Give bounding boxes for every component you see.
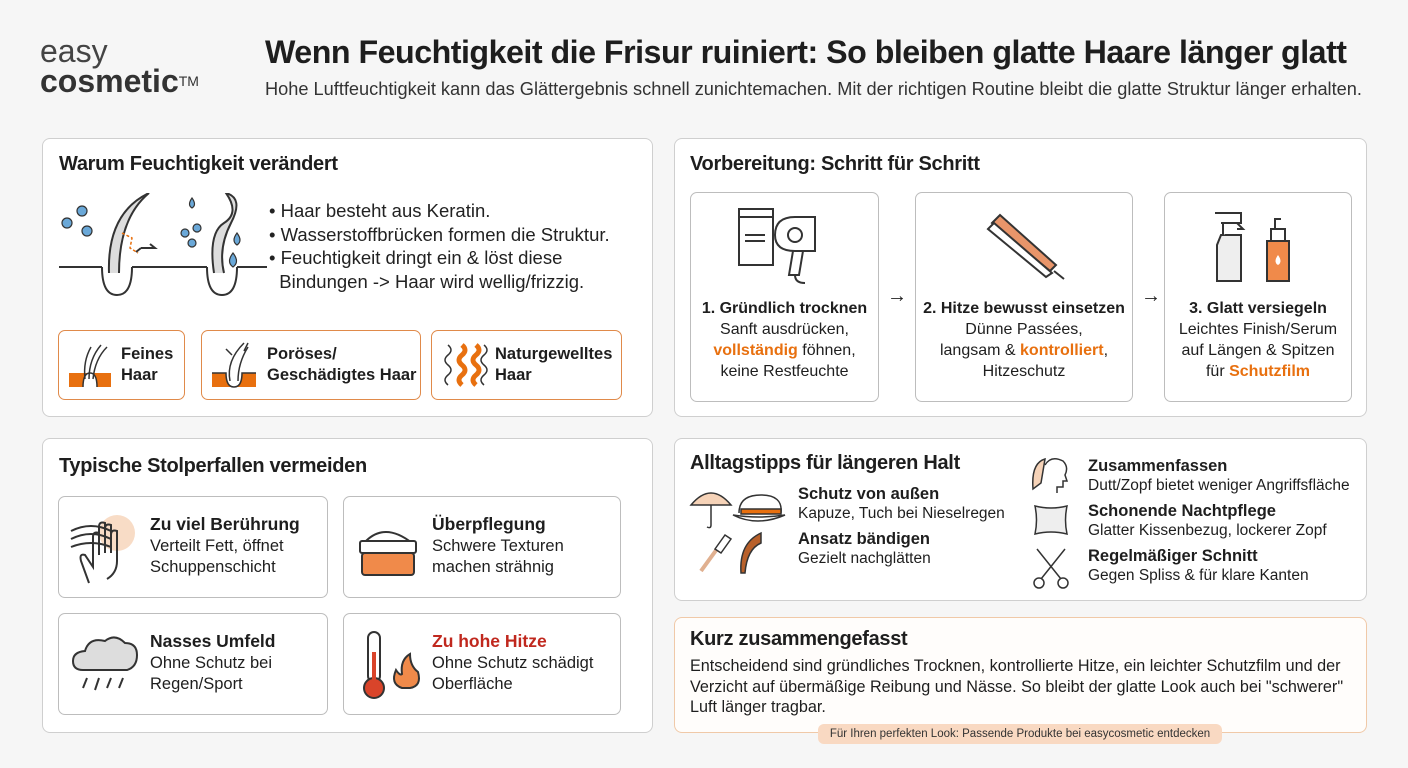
heading: Typische Stolperfallen vermeiden	[59, 455, 367, 477]
tip: regular cut: Regelmäßiger Schnitt	[1088, 547, 1258, 565]
step 2	[915, 192, 1133, 402]
card: too much heat: Zu hohe Hitze	[432, 631, 547, 651]
card: overcare: Überpflegung	[432, 514, 546, 534]
card: porous hair: Poröses/	[267, 345, 337, 363]
text: bullet list: Bindungen -> Haar wird wellig/frizzig.	[279, 270, 584, 292]
step 2: 2. Hitze bewusst einsetzen	[923, 300, 1125, 317]
subtitle: Hohe Luftfeuchtigkeit kann das Glättergebnis schnell zunichtemachen. Mit der richtigen Routine bleibt die glatte Struktur länger erhalten.	[265, 79, 1362, 99]
card: porous hair: Geschädigtes Haar	[267, 366, 416, 384]
card: overcare: machen strähnig	[432, 558, 554, 576]
icon: flat iron	[986, 214, 1065, 280]
tip: regular cut: Gegen Spliss & für klare Kanten	[1088, 567, 1309, 584]
heading: Alltagstipps für längeren Halt	[690, 452, 960, 474]
panel: why humidity	[42, 138, 653, 417]
text: summary: Entscheidend sind gründliches Trocknen, kontrollierte Hitze, ein leichter Schutzfilm und der Verzicht auf übermäßige Reibung und Nässe. So bleibt der glatte Look auch bei "schwerer" Luft länger tragbar.	[690, 657, 1343, 716]
text: bullet list: • Haar besteht aus Keratin.	[269, 200, 490, 221]
card: wavy hair	[431, 330, 622, 400]
tip: night care: Glatter Kissenbezug, lockerer Zopf	[1088, 522, 1327, 539]
card: too much touching: Verteilt Fett, öffnet	[150, 537, 284, 555]
text: bullet list	[269, 200, 610, 292]
step 3: Leichtes Finish/Serum	[1179, 321, 1337, 338]
card: wet environment	[58, 613, 328, 715]
step 2: Hitzeschutz	[983, 363, 1065, 380]
step 1	[690, 192, 879, 402]
icon: hair diagram	[59, 193, 267, 296]
heading: Kurz zusammengefasst	[690, 628, 907, 650]
panel: everyday tips	[674, 438, 1367, 601]
card: fine hair: Haar	[121, 366, 158, 384]
icon: towel and dryer	[738, 208, 816, 284]
tip: tie up	[1032, 457, 1350, 494]
card: fine hair	[58, 330, 185, 400]
panel: preparation steps	[674, 138, 1367, 417]
step 3: auf Längen & Spitzen	[1181, 342, 1334, 359]
tip: protection outside: Schutz von außen	[798, 485, 939, 503]
tip: protection outside	[690, 485, 1005, 528]
tip: tie up: Dutt/Zopf bietet weniger Angriffsfläche	[1088, 477, 1350, 494]
logo: cosmeticTM	[40, 63, 199, 99]
step 3: 3. Glatt versiegeln	[1189, 300, 1327, 317]
panel: pitfalls	[42, 438, 653, 733]
step 1: 1. Gründlich trocknen	[702, 300, 867, 317]
logo	[40, 33, 199, 99]
panel: summary	[674, 617, 1367, 733]
card: too much heat: Ohne Schutz schädigt	[432, 654, 593, 672]
heading: Warum Feuchtigkeit verändert	[59, 153, 338, 175]
tip: protection outside: Kapuze, Tuch bei Nieselregen	[798, 505, 1005, 522]
callout: CTA	[818, 724, 1222, 744]
step 3	[1164, 192, 1352, 402]
step 1: Sanft ausdrücken,	[720, 321, 849, 338]
arrow: →	[1141, 285, 1161, 307]
step 3: für Schutzfilm	[1206, 363, 1310, 380]
arrow: →	[887, 285, 907, 307]
text: bullet list: • Wasserstoffbrücken formen die Struktur.	[269, 224, 610, 244]
card: too much touching: Schuppenschicht	[150, 558, 276, 576]
heading: Vorbereitung: Schritt für Schritt	[690, 153, 980, 175]
card: overcare	[343, 496, 621, 598]
card: wavy hair: Naturgewelltes	[495, 345, 612, 363]
card: fine hair: Feines	[121, 345, 173, 363]
step 1: vollständig föhnen,	[713, 342, 856, 359]
tip: night care	[1034, 502, 1327, 539]
card: wet environment: Regen/Sport	[150, 675, 243, 693]
logo: easy	[40, 33, 108, 69]
step 2: Dünne Passées,	[965, 321, 1083, 338]
tip: tame roots: Ansatz bändigen	[798, 530, 930, 548]
card: too much touching: Zu viel Berührung	[150, 514, 300, 534]
icon: spray bottles	[1215, 212, 1290, 282]
tip: tie up: Zusammenfassen	[1088, 457, 1227, 475]
card: too much heat: Oberfläche	[432, 675, 513, 693]
card: wet environment: Ohne Schutz bei	[150, 654, 272, 672]
tip: tame roots: Gezielt nachglätten	[798, 550, 931, 567]
step 1: keine Restfeuchte	[720, 363, 849, 380]
step 2: langsam & kontrolliert,	[940, 342, 1108, 359]
card: overcare: Schwere Texturen	[432, 537, 564, 555]
text: bullet list: • Feuchtigkeit dringt ein & löst diese	[269, 247, 562, 268]
card: too much touching	[58, 496, 328, 598]
tip: regular cut	[1033, 547, 1309, 589]
card: wet environment: Nasses Umfeld	[150, 631, 275, 651]
title: Wenn Feuchtigkeit die Frisur ruiniert: So bleiben glatte Haare länger glatt	[265, 34, 1347, 70]
tip: night care: Schonende Nachtpflege	[1088, 502, 1276, 520]
card: wavy hair: Haar	[495, 366, 532, 384]
callout: CTA: Für Ihren perfekten Look: Passende Produkte bei easycosmetic entdecken	[830, 728, 1210, 740]
tip: tame roots	[700, 530, 931, 574]
card: too much heat	[343, 613, 621, 715]
card: porous hair	[201, 330, 421, 400]
